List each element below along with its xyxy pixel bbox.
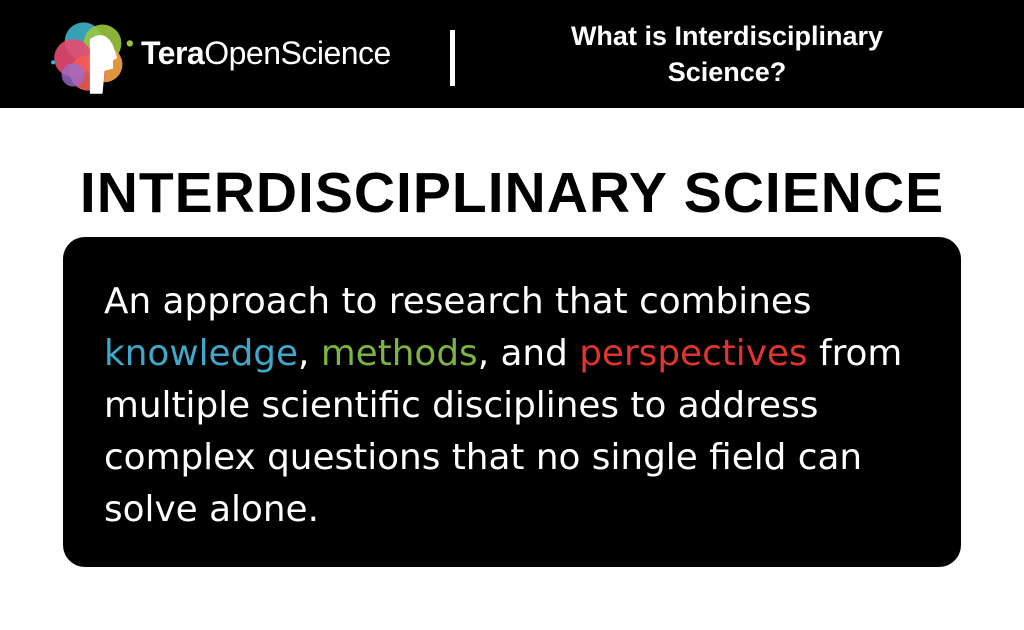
definition text — [104, 281, 902, 530]
logo text: TeraOpenScience — [141, 35, 391, 71]
divider — [450, 30, 455, 86]
definition text: multiple scientific disciplines to address — [104, 385, 818, 426]
definition text: complex questions that no single field can — [104, 437, 862, 478]
header bar — [0, 0, 1024, 108]
definition text: knowledge, methods, and perspectives from — [104, 333, 902, 374]
header question: What is Interdisciplinary — [571, 21, 883, 51]
header question — [571, 21, 883, 87]
definition text: An approach to research that combines — [104, 281, 812, 322]
header question: Science? — [668, 57, 786, 87]
definition text: solve alone. — [104, 489, 319, 530]
logo icon — [51, 22, 133, 94]
title: INTERDISCIPLINARY SCIENCE — [80, 161, 944, 225]
definition panel — [63, 237, 961, 567]
